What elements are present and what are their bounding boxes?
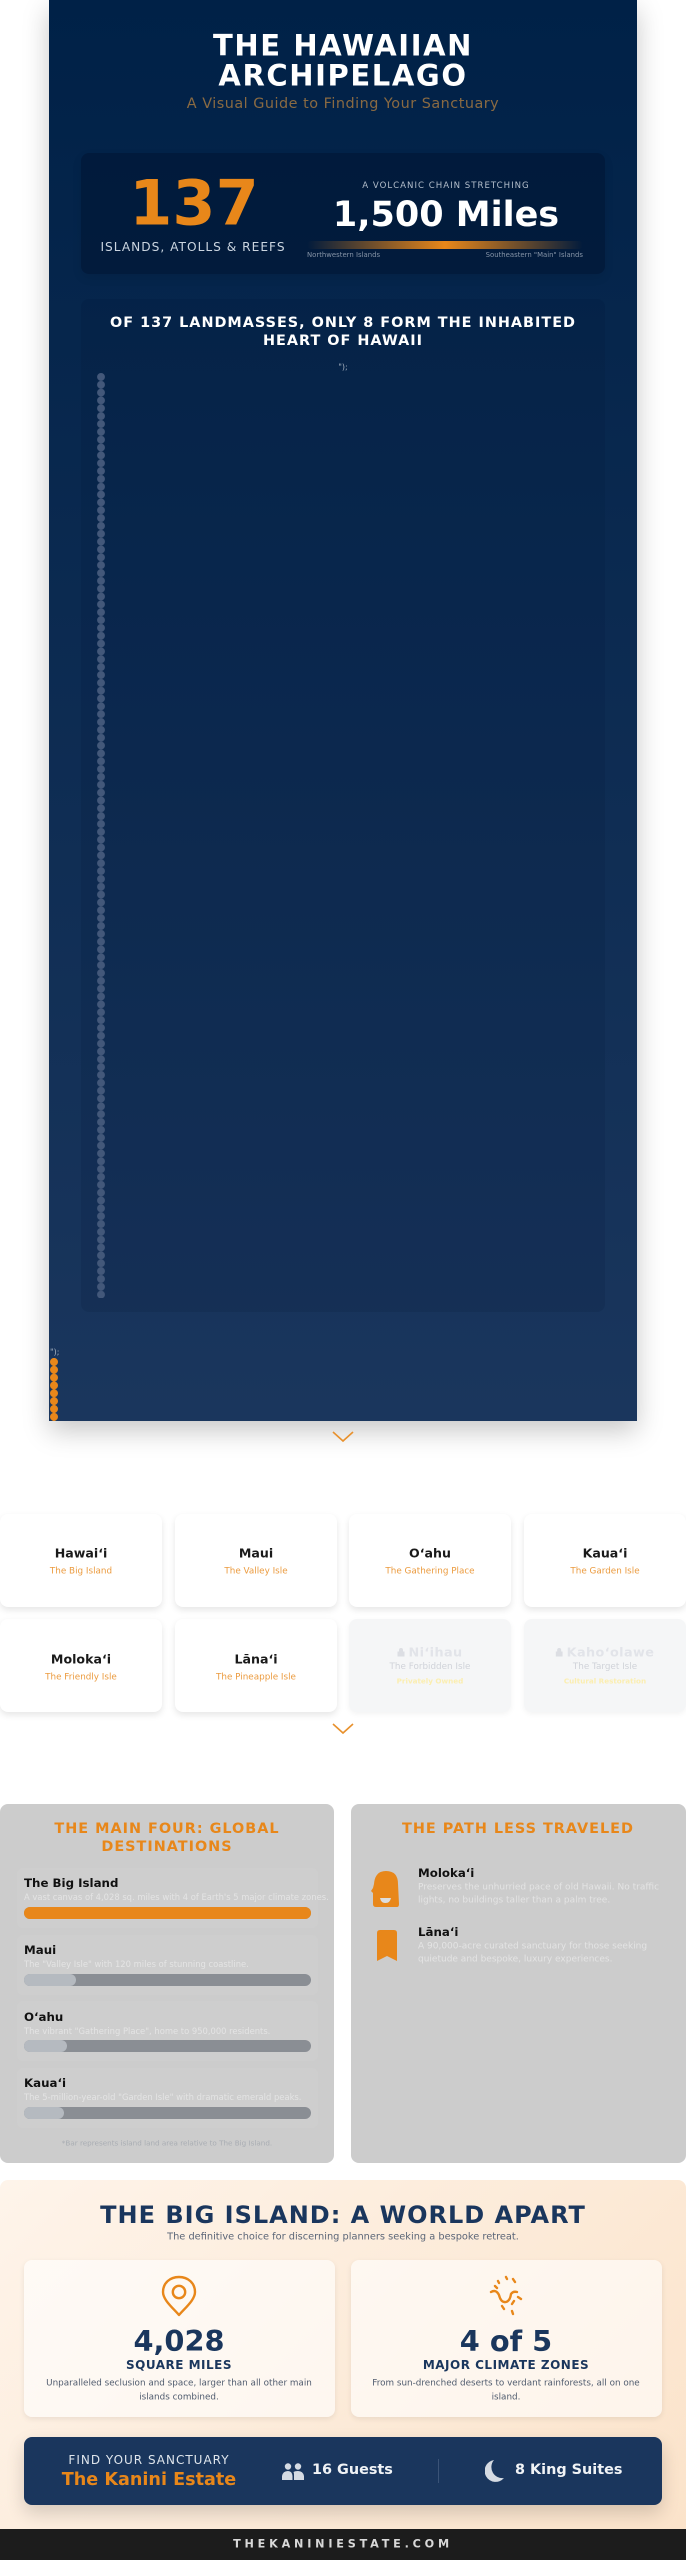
name: Kauaʻi (583, 1546, 627, 1560)
chart heading (110, 315, 576, 349)
label: northwestern: Northwestern Islands (307, 251, 380, 259)
stat label: SQUARE MILES (126, 2358, 232, 2372)
bar: Oahu (24, 2040, 311, 2052)
nickname: The Pineapple Isle (216, 1672, 296, 1682)
row: Kauai (17, 2068, 318, 2128)
panel: big island (0, 2180, 686, 2529)
status: Cultural Restoration (564, 1676, 646, 1686)
divider (438, 2459, 439, 2483)
panel heading: DESTINATIONS (101, 1839, 233, 1855)
name: Molokaʻi (418, 1866, 474, 1880)
footnote: *Bar represents island land area relative to The Big Island. (62, 2138, 272, 2148)
stat description (46, 2378, 312, 2402)
description: quietude and bespoke, luxury experiences. (418, 1954, 612, 1964)
icon: guests (282, 2463, 304, 2480)
title (213, 28, 473, 92)
name: Maui (239, 1546, 273, 1560)
stray script text: "); (50, 1348, 60, 1356)
stat description: From sun-drenched deserts to verdant rainforests, all on one (372, 2378, 640, 2388)
icon: map pin (162, 2276, 196, 2316)
stat label: ISLANDS, ATOLLS & REEFS (100, 240, 286, 254)
text: Lanai (418, 1925, 647, 1964)
stray script text: "); (338, 362, 348, 372)
section subtitle: The definitive choice for discerning planners seeking a bespoke retreat. (167, 2232, 519, 2242)
footer (0, 2529, 686, 2560)
panel: main four (0, 1804, 334, 2163)
icon: sun and climate (490, 2276, 522, 2316)
bar: Kauai (24, 2107, 311, 2119)
nickname: The Forbidden Isle (390, 1662, 470, 1672)
island card: Molokai (0, 1619, 162, 1712)
arrow: chevron down (332, 1431, 354, 1442)
row: Maui (17, 1935, 318, 1995)
chart heading: HEART OF HAWAII (263, 333, 423, 349)
stat description: Unparalleled seclusion and space, larger than all other main (46, 2378, 312, 2388)
status: Privately Owned (397, 1676, 463, 1686)
stat description (372, 2378, 640, 2402)
stat number: 4 of 5 (460, 2324, 552, 2358)
name: Molokaʻi (51, 1652, 111, 1666)
island card: Kahoolawe (locked) (524, 1619, 686, 1712)
guests text: 16 Guests (312, 2462, 393, 2478)
chain gradient bar (307, 241, 583, 249)
name: Oʻahu (24, 2010, 63, 2024)
icon: Molokai bell (371, 1871, 399, 1907)
panel: hero (49, 0, 637, 1421)
footer url: THEKANINIESTATE.COM (233, 2538, 453, 2550)
title: ARCHIPELAGO (218, 58, 468, 92)
stat: 137: 137 (129, 166, 259, 240)
description: lights, no buildings taller than a palm tree. (418, 1896, 610, 1906)
bar: Maui (24, 1974, 311, 1986)
description: Preserves the unhurried pace of old Hawaii. No traffic (418, 1882, 659, 1892)
subtitle: A Visual Guide to Finding Your Sanctuary (187, 96, 499, 112)
section heading: THE BIG ISLAND: A WORLD APART (100, 2201, 586, 2229)
name: Lānaʻi (234, 1652, 278, 1666)
name: Niʻihau (408, 1646, 462, 1660)
stat description: islands combined. (139, 2392, 219, 2402)
CTA eyebrow: FIND YOUR SANCTUARY (68, 2453, 230, 2467)
description: A vast canvas of 4,028 sq. miles with 4 of Earth's 5 major climate zones. (24, 1892, 329, 1902)
uninhabited dots (97, 373, 105, 1298)
island card: Hawaii (0, 1514, 162, 1607)
nickname: The Target Isle (573, 1662, 637, 1672)
name: Hawaiʻi (55, 1546, 107, 1560)
panel: path less traveled (351, 1804, 686, 2163)
stat label: MAJOR CLIMATE ZONES (423, 2358, 589, 2372)
stat: 1,500 miles: 1,500 Miles (333, 195, 559, 235)
panel heading: THE MAIN FOUR: GLOBAL (54, 1821, 280, 1837)
panel heading (54, 1821, 280, 1855)
stat number: 4,028 (133, 2324, 225, 2358)
stat card: square miles (24, 2260, 335, 2417)
arrow: chevron down (332, 1723, 354, 1734)
description (418, 1941, 647, 1964)
nickname: The Big Island (50, 1566, 112, 1576)
description: A 90,000-acre curated sanctuary for those seeking (418, 1941, 647, 1951)
island card: Lanai (175, 1619, 337, 1712)
island card: Maui (175, 1514, 337, 1607)
name: Lānaʻi (418, 1925, 458, 1939)
island card: Niihau (locked) (349, 1619, 511, 1712)
panel: landmass chart (81, 299, 605, 1312)
chart heading: OF 137 LANDMASSES, ONLY 8 FORM THE INHABITED (110, 315, 576, 331)
name: Oʻahu (409, 1546, 451, 1560)
island card: Oahu (349, 1514, 511, 1607)
nickname: The Garden Isle (570, 1566, 640, 1576)
nickname: The Gathering Place (385, 1566, 475, 1576)
nickname: The Friendly Isle (45, 1672, 117, 1682)
stat panel (81, 153, 605, 274)
moon icon (485, 2460, 504, 2482)
description (418, 1882, 659, 1906)
inhabited dots (50, 1358, 58, 1421)
name: The Big Island (24, 1876, 118, 1890)
description: The vibrant "Gathering Place", home to 950,000 residents. (24, 2026, 270, 2036)
nickname: The Valley Isle (224, 1566, 288, 1576)
row: Oahu (17, 2001, 318, 2061)
island card: Kauai (524, 1514, 686, 1607)
text: Molokai (418, 1866, 659, 1906)
icon: Lanai bookmark (377, 1930, 397, 1961)
row: Big Island (17, 1868, 318, 1928)
name: Maui (24, 1943, 56, 1957)
bar: Big Island (24, 1907, 311, 1919)
stat description: island. (492, 2392, 520, 2402)
chain caption: A VOLCANIC CHAIN STRETCHING (362, 181, 530, 191)
panel heading: THE PATH LESS TRAVELED (402, 1821, 634, 1837)
name: Kauaʻi (24, 2076, 66, 2090)
call to action (24, 2437, 662, 2505)
description: The 5-million-year-old "Garden Isle" with dramatic emerald peaks. (24, 2092, 301, 2102)
stat card: climate zones (351, 2260, 662, 2417)
suites text: 8 King Suites (515, 2462, 622, 2478)
CTA estate name: The Kanini Estate (62, 2470, 236, 2490)
name: Kahoʻolawe (567, 1646, 654, 1660)
title: THE HAWAIIAN (213, 28, 473, 62)
label: southeastern: Southeastern "Main" Islands (486, 251, 583, 259)
description: The "Valley Isle" with 120 miles of stunning coastline. (24, 1959, 249, 1969)
